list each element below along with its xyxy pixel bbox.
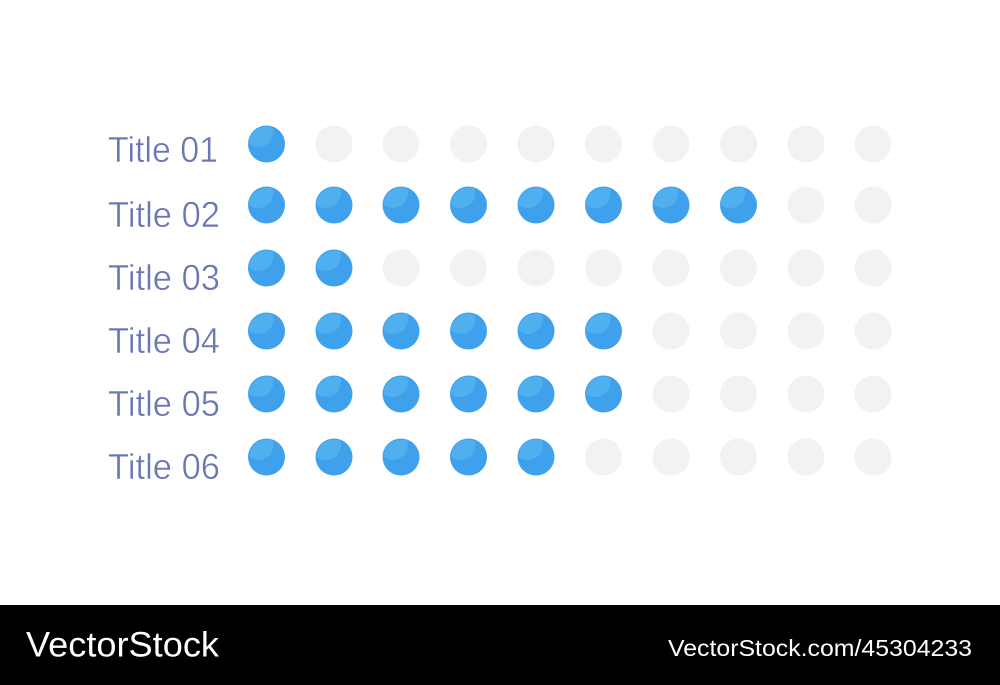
dots: 1 of 10 filled xyxy=(244,117,892,162)
row: Title 04 xyxy=(108,304,892,361)
label: Title 02: Title 02 xyxy=(108,194,220,235)
row: Title 03 xyxy=(108,241,892,298)
footer url: VectorStock.com/45304233 xyxy=(668,635,972,661)
label: Title 03: Title 03 xyxy=(108,257,220,298)
dots: 6 of 10 filled xyxy=(244,304,892,350)
row: Title 06 xyxy=(108,430,892,487)
label: Title 05: Title 05 xyxy=(108,383,220,424)
row: Title 01 xyxy=(108,117,892,170)
dots: 8 of 10 filled xyxy=(244,178,892,224)
footer bar xyxy=(0,605,1000,685)
label: Title 01: Title 01 xyxy=(108,129,218,170)
footer brand: VectorStock xyxy=(26,626,220,664)
row: Title 05 xyxy=(108,367,892,424)
dots: 5 of 10 filled xyxy=(244,430,892,476)
dots: 2 of 10 filled xyxy=(244,241,892,286)
label: Title 06: Title 06 xyxy=(108,446,220,487)
label: Title 04: Title 04 xyxy=(108,320,220,361)
dots: 6 of 10 filled xyxy=(244,367,892,412)
row: Title 02 xyxy=(108,178,892,235)
